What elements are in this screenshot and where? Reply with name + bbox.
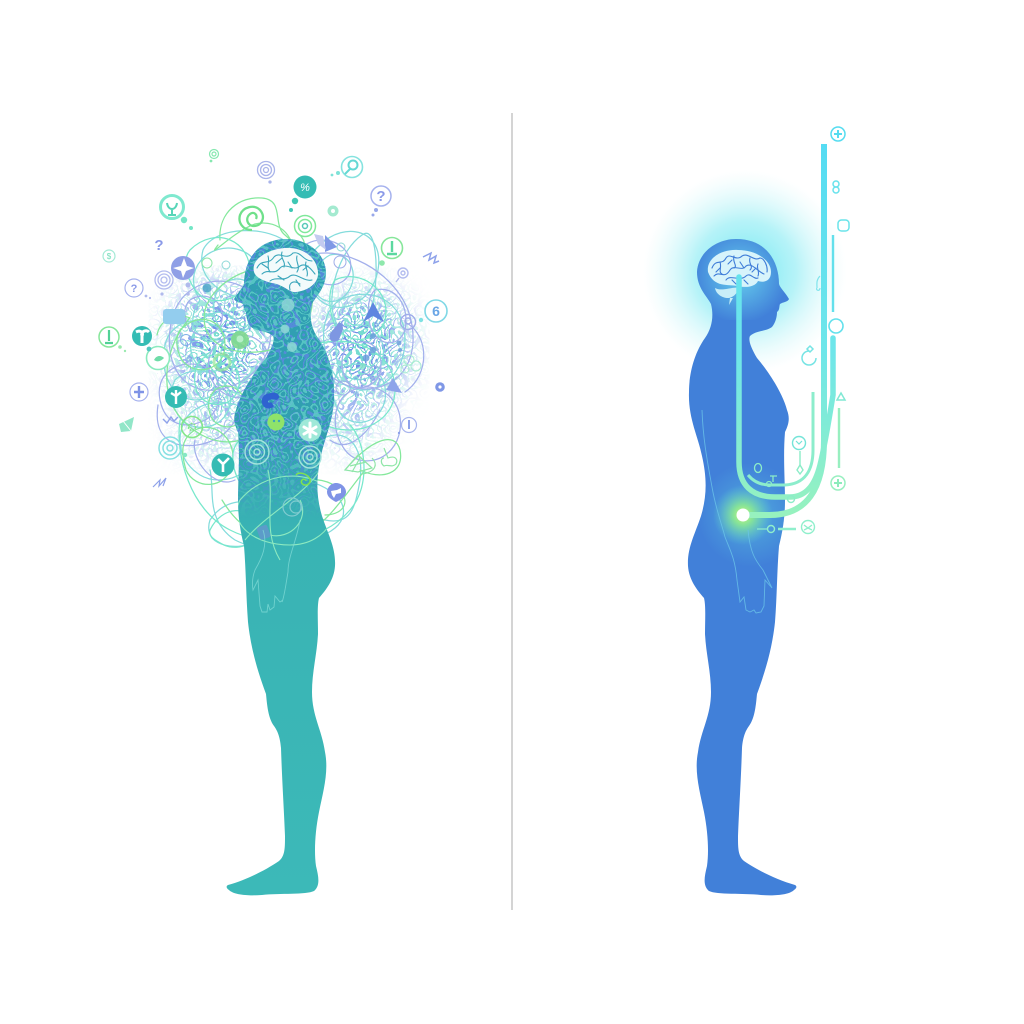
thought dots <box>331 171 340 176</box>
neural texture inside body <box>234 239 334 560</box>
secondary tube <box>748 392 813 485</box>
scribble: blue mark <box>153 478 166 487</box>
brain: left <box>254 248 318 292</box>
small blue dots <box>202 284 402 369</box>
icon: filled blue blob <box>330 322 343 342</box>
lower body ring <box>283 498 302 516</box>
brain: right <box>708 250 771 305</box>
spiral: green, above head <box>240 207 263 230</box>
lower body spiral <box>296 473 310 485</box>
icon: cyan ring <box>425 300 447 322</box>
gut glow <box>713 485 773 545</box>
icon: lavender spiral <box>258 162 274 183</box>
icon: green ring left <box>99 327 119 347</box>
thought dots green <box>118 345 126 352</box>
icon: lavender speech circle <box>327 483 346 502</box>
icon: question ring <box>371 186 391 206</box>
body icon: target right <box>299 446 321 468</box>
thought dot green <box>379 260 385 266</box>
icon: figure eight <box>833 181 839 193</box>
icon: node below tube <box>788 496 794 502</box>
icon: teal percent circle: % <box>300 182 310 194</box>
icon: open ring with diamond <box>802 346 816 365</box>
stem with diamond <box>797 451 803 474</box>
thought dot cyan <box>419 318 423 322</box>
icon: small mint spiral top <box>210 150 218 162</box>
icon: clock ring <box>792 436 806 450</box>
icon: lavender star circle <box>171 256 195 280</box>
icon: green sketch cluster <box>345 448 397 474</box>
icon: small hook <box>817 276 820 290</box>
icon: lavender question ring: ? <box>131 283 138 295</box>
thought dot mint <box>183 453 187 457</box>
icon: ring on line <box>829 319 843 333</box>
icon: small mint circle <box>328 206 338 216</box>
icon: lavender ring right <box>400 314 416 330</box>
small sketch icons in cloud <box>180 243 381 395</box>
icon: plus ring bottom <box>831 476 845 490</box>
thought dots: lavender left <box>145 282 190 299</box>
icon: light blue card <box>163 309 185 324</box>
sketch: molecule cloud <box>401 355 421 373</box>
icon: small mint coin: $ <box>107 252 112 261</box>
tangled thought mesh <box>148 266 430 474</box>
icon: magnifier ring <box>342 156 362 178</box>
icon: cyan ring: 6 <box>432 303 440 319</box>
body icon: lime circle <box>268 414 284 430</box>
icon: lavender flower ring <box>130 383 148 401</box>
icon: mint thick ring <box>160 196 184 218</box>
icon: blue triangle lower right <box>386 378 402 393</box>
icon: rounded square <box>838 220 849 231</box>
icon: lavender pin ring <box>398 418 416 434</box>
icon: node on secondary tube <box>766 476 777 486</box>
body icon: blue C <box>262 393 278 408</box>
icon: teal percent circle <box>294 176 316 198</box>
icon: lavender filled circle <box>435 382 445 392</box>
main vertical tube <box>748 144 824 515</box>
icon: blue chevron arrow <box>363 302 384 322</box>
lower body blue patch <box>256 524 271 540</box>
icon: green gear ring <box>182 416 202 438</box>
glows clipped to body <box>698 239 785 558</box>
icon: plus ring top <box>831 127 845 141</box>
icon: green spiral ring <box>294 216 316 236</box>
icon: small triangle <box>837 393 845 400</box>
icon: blue question mark: ? <box>154 237 164 254</box>
spine tube inside body <box>739 277 833 497</box>
icon: teal tree circle <box>165 386 187 408</box>
icon: green ring left <box>214 354 230 370</box>
panel: focused gut-brain figure <box>643 127 849 895</box>
icon: lavender target <box>155 271 173 289</box>
thought dots lavender <box>372 208 378 216</box>
icon: mint diamond <box>119 417 134 432</box>
head glow <box>643 170 847 374</box>
icon: blue triangle near head <box>314 234 337 252</box>
body silhouette: focused <box>688 239 796 895</box>
icon: lavender question ring <box>125 279 143 297</box>
thought dots mint <box>181 217 193 230</box>
icon: teal branch circle <box>212 454 234 476</box>
gut core <box>736 508 750 522</box>
body silhouette: scattered <box>227 239 335 895</box>
body icon: lime ring on neck side <box>231 331 249 349</box>
thought dot teal <box>147 347 151 351</box>
divider line <box>511 113 513 910</box>
arm and hand outline: right <box>702 410 772 613</box>
icon: teal clover circle <box>132 326 152 346</box>
tangled thought loops behind body <box>157 198 424 547</box>
icon: green ring right <box>382 238 402 258</box>
icon: question ring: ? <box>376 188 386 205</box>
body icon: mint star circle <box>298 418 322 442</box>
body icon: target left <box>245 440 269 464</box>
scribble: lavender <box>163 417 178 423</box>
thought dots teal <box>289 198 298 212</box>
thin line lower <box>838 408 840 468</box>
icon: cross ring <box>802 520 814 534</box>
panel: scattered mind figure <box>99 150 450 895</box>
pale body circles <box>280 298 297 352</box>
thin line upper <box>832 235 834 312</box>
icon: mint leaf ring <box>146 346 170 370</box>
hand outline: left <box>252 520 300 612</box>
icon: zigzag <box>423 253 439 263</box>
circuit line with node <box>757 526 796 532</box>
loops over lower body <box>237 470 336 560</box>
icon: cyan target <box>159 437 181 459</box>
icon: small mint coin <box>103 250 115 262</box>
icon: small lavender pin <box>396 268 408 282</box>
icon: small ring inside body <box>754 464 762 472</box>
